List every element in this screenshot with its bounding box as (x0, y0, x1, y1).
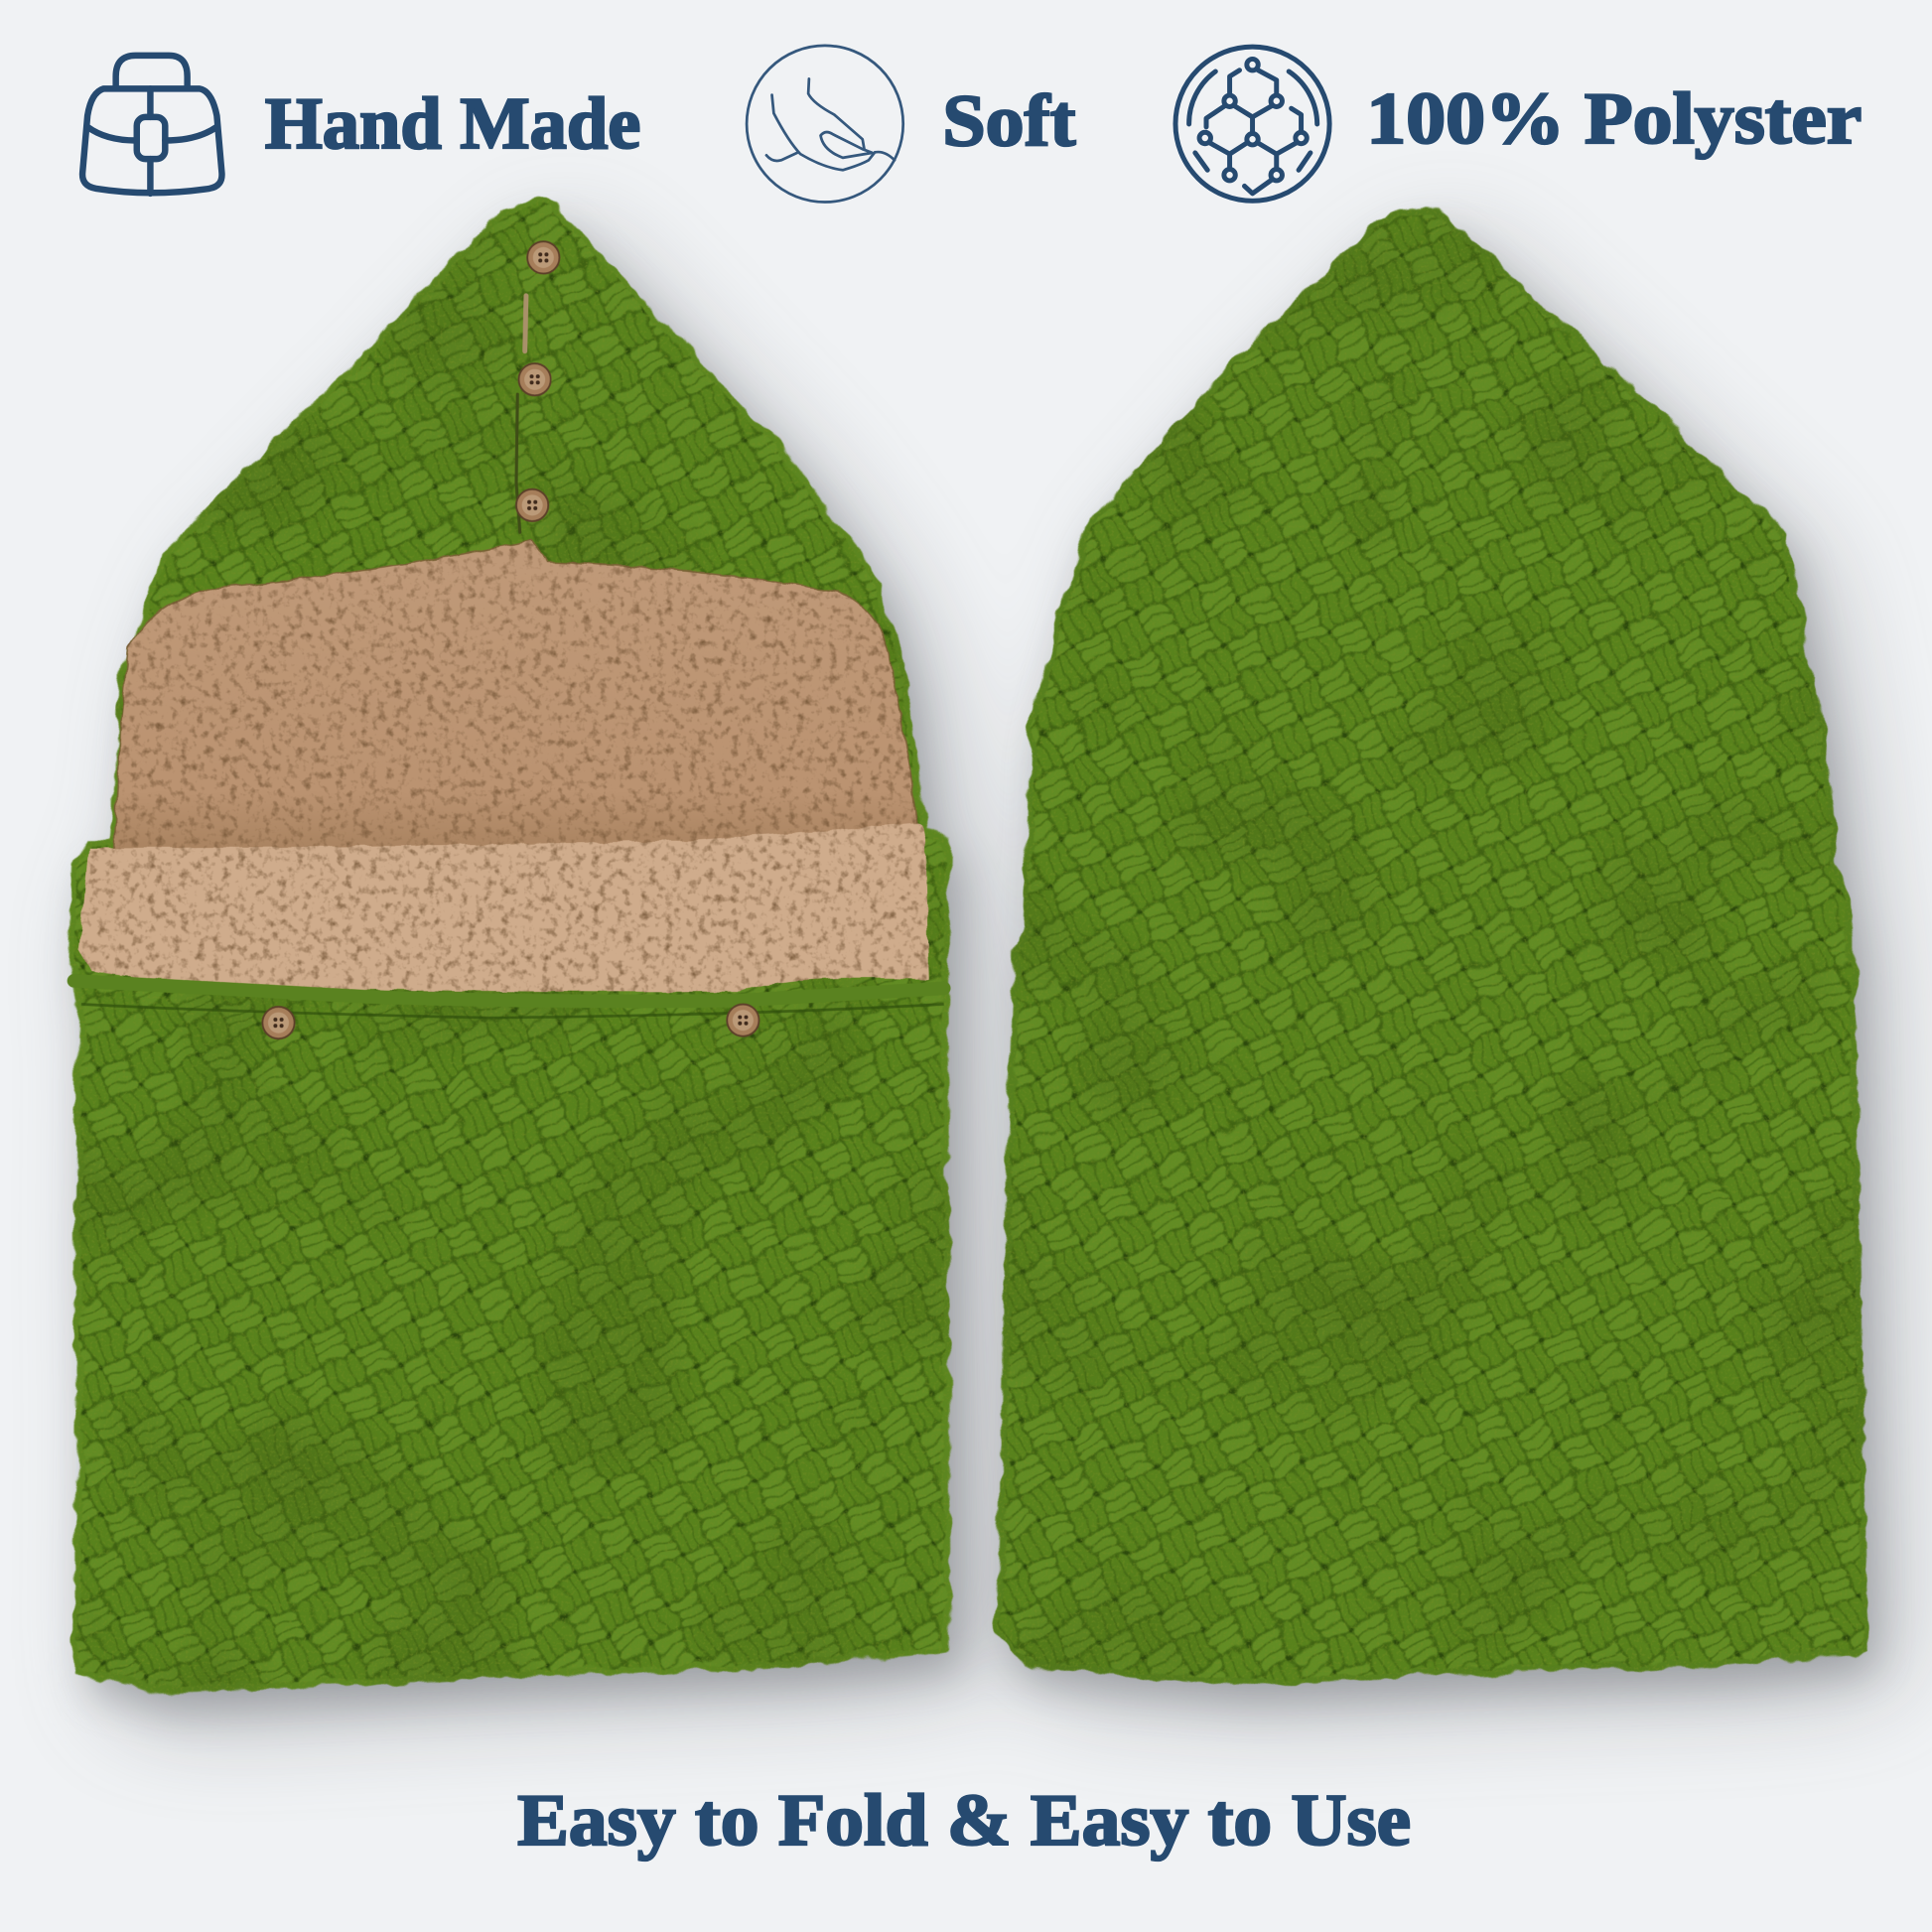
button 5 (727, 1004, 759, 1036)
fleece fold band (78, 823, 929, 992)
button 4 (262, 1007, 295, 1038)
green knit body (71, 204, 947, 1691)
heading: Hand Made: Hand Made (265, 83, 640, 165)
pocket flap edge (73, 981, 944, 1018)
icon: soft hand in circle (747, 46, 903, 203)
left product: open knitted swaddle with fleece lining (71, 204, 947, 1691)
soft drop shadows (83, 225, 1897, 1723)
heading: 100% Polyster: 100% Polyster (1366, 78, 1862, 160)
icon: polymer molecule in circle (1175, 47, 1329, 201)
button 3 (516, 489, 548, 521)
inner fleece panel (113, 540, 921, 855)
hood opening seam (516, 296, 526, 532)
button 1 (527, 241, 559, 274)
button 2 (518, 363, 551, 395)
caption: Easy to Fold & Easy to Use: Easy to Fold & Easy to Use (517, 1780, 1411, 1862)
right product: back of knitted swaddle (1000, 211, 1865, 1681)
icon: handbag (hand made) (82, 56, 221, 194)
heading: Soft: Soft (942, 80, 1076, 162)
